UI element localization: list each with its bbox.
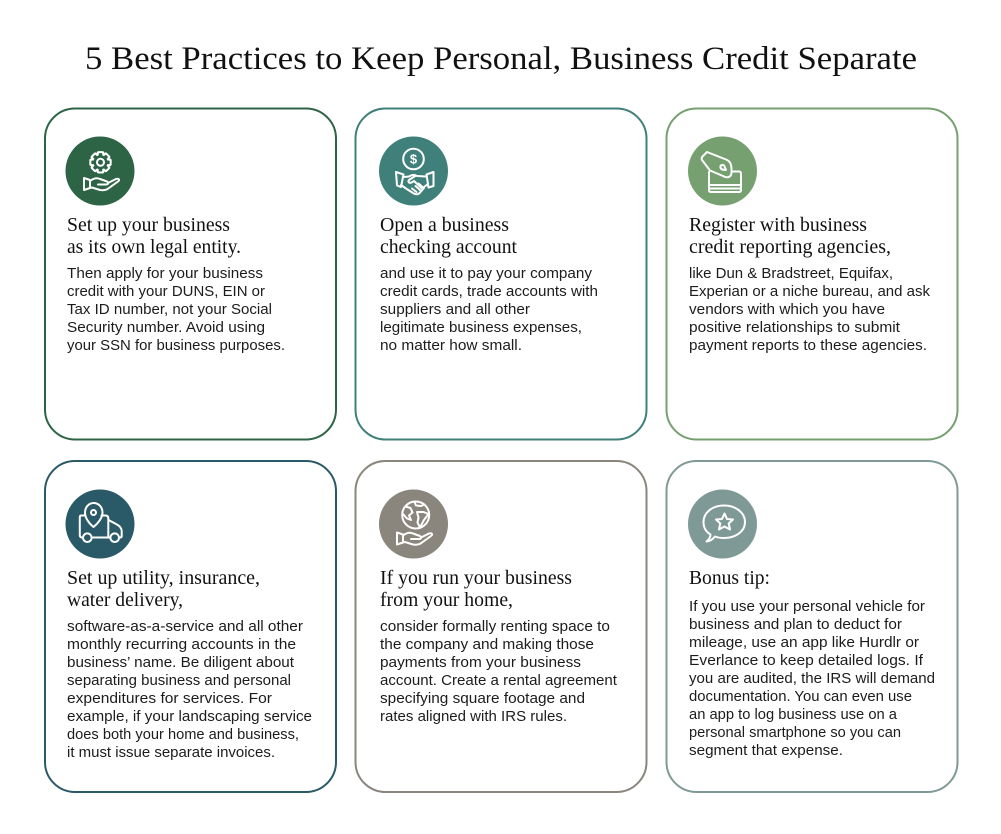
heading: Set up your business xyxy=(67,214,230,236)
text block: mileage, use an app like Hurdlr or xyxy=(689,635,919,651)
icon: speech bubble with star xyxy=(688,490,757,558)
heading: water delivery, xyxy=(67,589,183,611)
text block: suppliers and all other xyxy=(380,302,530,318)
heading: from your home, xyxy=(380,589,513,611)
icon: coin and handshake: $ xyxy=(410,152,418,167)
text block: example, if your landscaping service xyxy=(67,709,312,725)
heading xyxy=(689,214,891,258)
text block: personal smartphone so you can xyxy=(689,725,901,741)
text block: If you use your personal vehicle for xyxy=(689,599,925,615)
heading: Open a business xyxy=(380,214,509,236)
panel: bonus tip xyxy=(666,461,958,792)
panel: checking account xyxy=(356,108,646,440)
text block: positive relationships to submit xyxy=(689,320,900,336)
text block: specifying square footage and xyxy=(380,691,585,707)
text block: Experian or a niche bureau, and ask xyxy=(689,284,931,300)
heading: If you run your business xyxy=(380,567,572,589)
heading xyxy=(380,567,572,611)
text block: Then apply for your business xyxy=(67,266,263,282)
text block: credit with your DUNS, EIN or xyxy=(67,284,265,300)
text block xyxy=(67,266,285,354)
heading xyxy=(67,567,260,611)
text block: does both your home and business, xyxy=(67,727,299,743)
text block: an app to log business use on a xyxy=(689,707,898,723)
text block xyxy=(689,599,935,759)
heading: as its own legal entity. xyxy=(67,236,241,258)
text block: segment that expense. xyxy=(689,743,843,759)
text block: payment reports to these agencies. xyxy=(689,338,927,354)
text block: vendors with which you have xyxy=(689,302,885,318)
text block: you are audited, the IRS will demand xyxy=(689,671,935,687)
heading: credit reporting agencies, xyxy=(689,236,891,258)
text block: rates aligned with IRS rules. xyxy=(380,709,567,725)
panel: home business xyxy=(356,461,646,792)
heading xyxy=(380,214,517,258)
text block: separating business and personal xyxy=(67,673,291,689)
text block xyxy=(689,266,931,354)
text block: Tax ID number, not your Social xyxy=(67,302,272,318)
text block: account. Create a rental agreement xyxy=(380,673,617,689)
icon: globe in hand xyxy=(379,490,448,558)
icon: coin and handshake xyxy=(379,136,448,206)
heading: checking account xyxy=(380,236,517,258)
panel: credit reporting agencies xyxy=(666,108,958,440)
title: 5 Best Practices to Keep Personal, Business Credit Separate xyxy=(85,41,917,77)
text block: business and plan to deduct for xyxy=(689,617,902,633)
text block: like Dun & Bradstreet, Equifax, xyxy=(689,266,893,282)
icon: delivery truck with pin xyxy=(66,490,134,558)
text block: expenditures for services. For xyxy=(67,691,272,707)
icon: gear in hand xyxy=(66,136,134,206)
icon: hand with card xyxy=(688,136,757,206)
text block: business’ name. Be diligent about xyxy=(67,655,294,671)
text block: software-as-a-service and all other xyxy=(67,619,303,635)
text block: Everlance to keep detailed logs. If xyxy=(689,653,924,669)
text block xyxy=(67,619,312,761)
heading: Register with business xyxy=(689,214,867,236)
text block: your SSN for business purposes. xyxy=(67,338,285,354)
text block: documentation. You can even use xyxy=(689,689,912,705)
text block xyxy=(380,619,617,725)
text block: Security number. Avoid using xyxy=(67,320,265,336)
text block: legitimate business expenses, xyxy=(380,320,582,336)
text block: payments from your business xyxy=(380,655,581,671)
text block: monthly recurring accounts in the xyxy=(67,637,296,653)
text block: the company and making those xyxy=(380,637,594,653)
text block: and use it to pay your company xyxy=(380,266,593,282)
text block xyxy=(380,266,598,354)
heading: Set up utility, insurance, xyxy=(67,567,260,589)
text block: consider formally renting space to xyxy=(380,619,610,635)
text block: credit cards, trade accounts with xyxy=(380,284,598,300)
text block: it must issue separate invoices. xyxy=(67,745,275,761)
panel: legal entity xyxy=(45,108,336,440)
heading xyxy=(67,214,241,258)
heading: Bonus tip: xyxy=(689,567,770,589)
text block: no matter how small. xyxy=(380,338,522,354)
panel: utility accounts xyxy=(45,461,336,792)
